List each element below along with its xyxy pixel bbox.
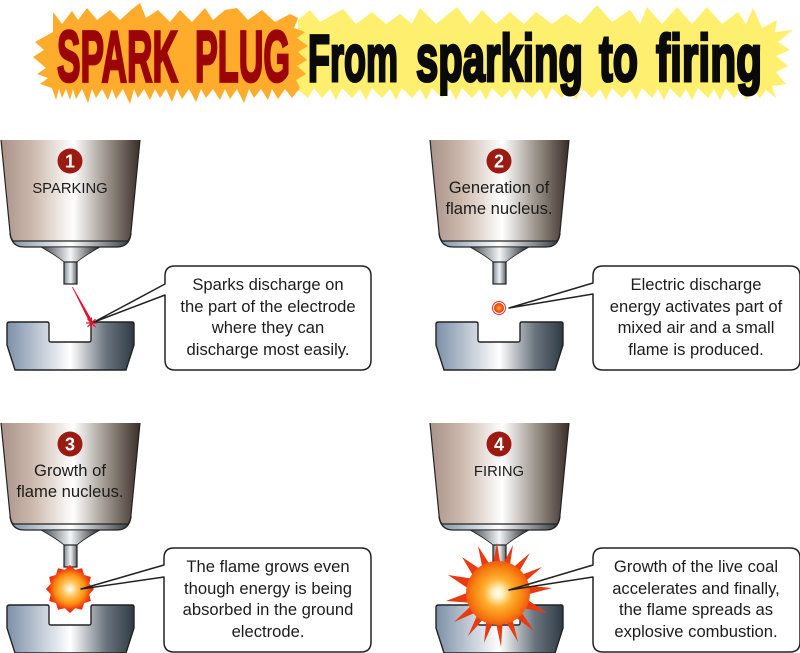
panel 1: sparking: [1, 140, 371, 370]
panel 3: growth of flame nucleus: [1, 423, 371, 653]
spark plug electrode: [1, 423, 140, 567]
callout 2: energy activates part of: [610, 297, 783, 316]
banner burst: orange: [33, 3, 308, 104]
callout 2: Electric discharge: [631, 275, 761, 294]
spark plug electrode: [430, 423, 569, 567]
callout 1: Sparks discharge on: [192, 275, 344, 294]
callout 3: [81, 548, 371, 652]
ground electrode: [7, 605, 134, 653]
title: From sparking to firing: [308, 21, 762, 95]
label: SPARKING: SPARKING: [32, 181, 108, 197]
step number 1: [58, 148, 82, 174]
callout 1: [94, 266, 371, 370]
callout 3: The flame grows even: [186, 557, 350, 576]
callout 3: electrode.: [232, 622, 304, 641]
spark plug electrode: [430, 140, 569, 284]
step number 2: [486, 148, 512, 174]
callout 3: though energy is being: [184, 579, 352, 598]
title: SPARK PLUG: SPARK: [57, 18, 178, 98]
callout 4: accelerates and finally,: [612, 579, 780, 598]
title: From sparking to firing: From: [308, 21, 398, 95]
label: growth of flame nucleus: flame nucleus.: [16, 482, 124, 501]
ground electrode: [436, 605, 563, 653]
callout 4: the flame spreads as: [619, 600, 773, 619]
ground electrode: [7, 322, 134, 370]
label: growth of flame nucleus: [16, 461, 124, 501]
title: From sparking to firing: to: [599, 21, 638, 95]
flame nucleus: [492, 302, 506, 314]
ground electrode: [436, 322, 563, 370]
callout 4: Growth of the live coal: [614, 557, 778, 576]
spark burst: [86, 318, 97, 328]
callout 1: discharge most easily.: [187, 340, 349, 359]
panel 2: generation of flame nucleus: [430, 140, 800, 370]
explosive flame burst: [446, 543, 552, 647]
banner burst: yellow: [296, 5, 793, 100]
label: generation of flame nucleus: flame nucleus.: [446, 199, 552, 218]
label: growth of flame nucleus: Growth of: [34, 461, 106, 480]
callout 1: where they can: [211, 318, 324, 337]
step number 2: 2: [494, 152, 504, 172]
panel 4: firing: [430, 423, 800, 653]
step number 3: 3: [65, 434, 75, 454]
callout 2: flame is produced.: [628, 340, 764, 359]
label: generation of flame nucleus: [446, 178, 552, 218]
title: From sparking to firing: sparking: [416, 21, 583, 95]
label: generation of flame nucleus: Generation of: [449, 178, 550, 197]
spark line: [72, 287, 93, 324]
step number 1: 1: [65, 152, 75, 172]
title banner: PLUG: [195, 18, 290, 98]
callout 3: absorbed in the ground: [183, 600, 353, 619]
callout 2: [509, 266, 800, 370]
flame: [46, 565, 94, 613]
step number 3: [58, 432, 82, 456]
callout 2: mixed air and a small: [618, 318, 774, 337]
label: FIRING: FIRING: [474, 464, 524, 480]
step number 4: 4: [494, 434, 504, 454]
step number 4: [486, 432, 512, 456]
callout 4: explosive combustion.: [614, 622, 778, 641]
spark plug electrode: [1, 140, 140, 284]
title banner: [33, 3, 793, 104]
callout 4: [509, 548, 800, 652]
callout 1: the part of the electrode: [180, 297, 356, 316]
